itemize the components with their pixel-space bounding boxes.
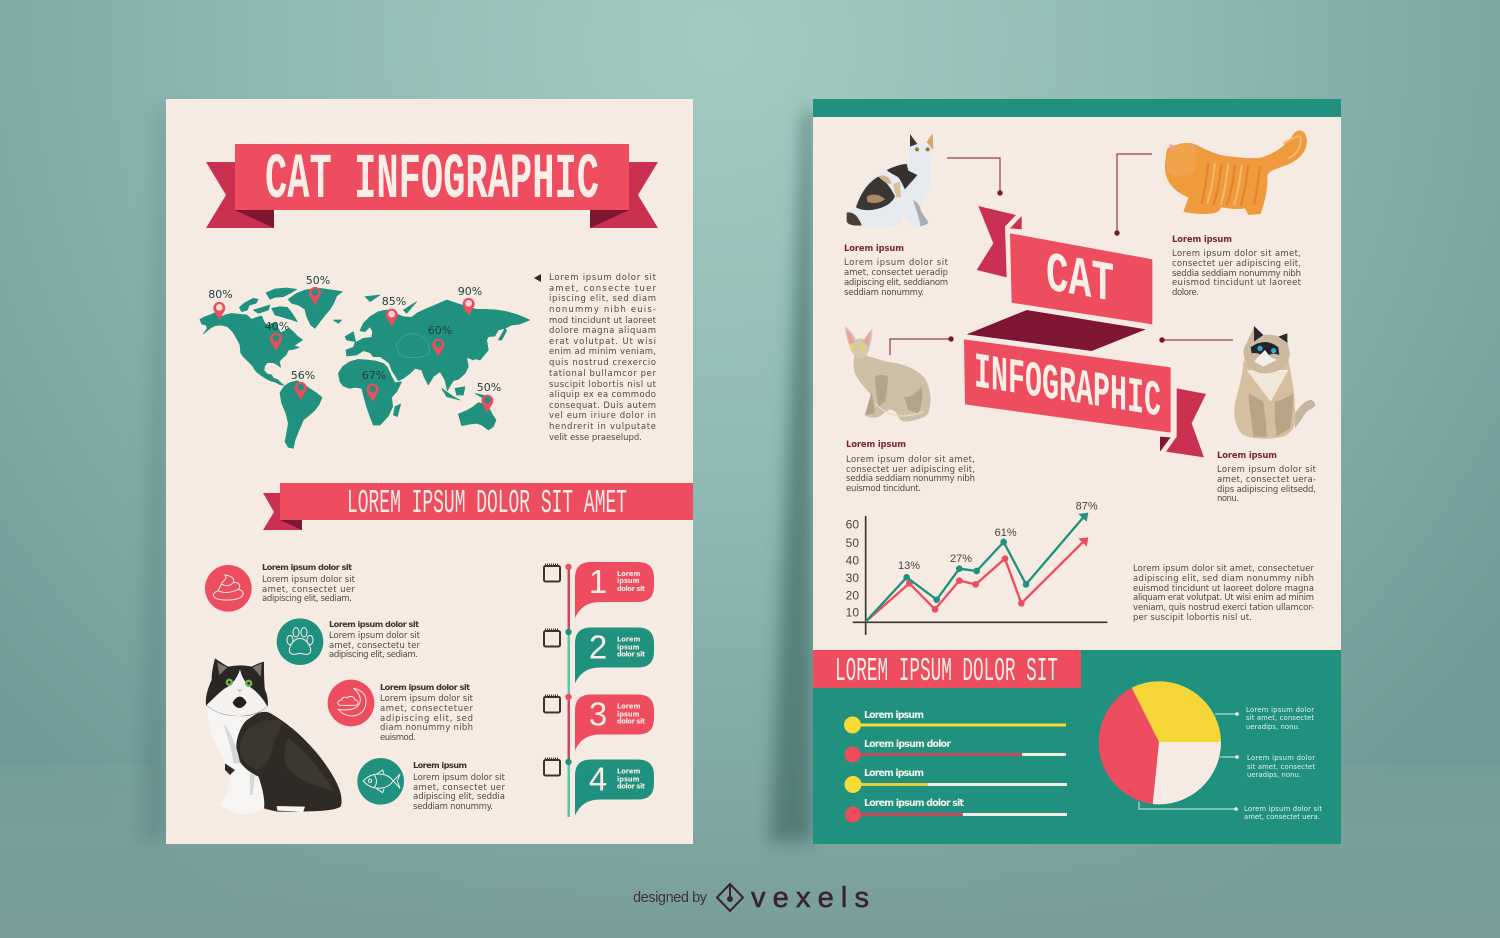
- section ribbon: [263, 483, 693, 530]
- green series: [866, 513, 1088, 622]
- text: item 3: euismod.: [380, 733, 416, 743]
- progress bars: [844, 710, 1067, 822]
- bubble 2: [575, 628, 654, 684]
- text: item 2: amet, consectetu ter: [329, 641, 420, 651]
- map paragraph: nonummy nibh euis-: [549, 305, 656, 315]
- text: item 1: Lorem ipsum dolor sit: [262, 562, 352, 572]
- pie legend: ueradips, nonu.: [1247, 771, 1301, 779]
- map paragraph: aliquip ex ea commodo: [549, 390, 656, 400]
- map paragraph: vel eum iriure dolor in: [549, 411, 656, 421]
- bubble 1: dolor sit: [617, 585, 645, 593]
- bar 3: Lorem ipsum: [864, 768, 924, 779]
- section ribbon: LOREM IPSUM DOLOR SIT AMET: [347, 485, 627, 522]
- chart paragraph: per suscipit lobortis nisl ut.: [1133, 613, 1252, 623]
- pie legend: Lorem ipsum dolor: [1247, 754, 1315, 762]
- axis labels: 60: [846, 518, 859, 532]
- map paragraph: hendrerit in vulputate: [549, 422, 656, 432]
- map paragraph: suscipit lobortis nisl ut: [549, 380, 657, 390]
- caption: calico cat: adipiscing elit, seddianom: [844, 278, 948, 288]
- chart value labels: [898, 501, 1098, 572]
- caption: ragdoll cat: Lorem ipsum: [1217, 450, 1277, 460]
- caption: sphynx cat: Lorem ipsum dolor sit amet,: [846, 455, 975, 465]
- axis labels: [846, 518, 859, 620]
- axis labels: 40: [846, 553, 859, 567]
- timeline: [544, 562, 654, 817]
- map paragraph: erat volutpat. Ut wisi: [549, 337, 656, 347]
- chart value labels: 27%: [950, 553, 972, 565]
- section heading band: [813, 650, 1081, 690]
- icon: calico cat: [846, 133, 934, 228]
- map percent labels: 40%: [265, 320, 289, 333]
- caption: calico cat: Lorem ipsum: [844, 243, 904, 253]
- chart value labels: 87%: [1076, 501, 1098, 513]
- title ribbon: [206, 144, 658, 228]
- icon: ragdoll cat: [1234, 326, 1315, 439]
- caption: sphynx cat: consectet uer adipiscing elit,: [846, 465, 975, 475]
- caption: calico cat: [844, 243, 949, 298]
- bar 2: Lorem ipsum dolor: [864, 739, 951, 750]
- bubble 2: dolor sit: [617, 650, 645, 658]
- text: item 2: [329, 619, 421, 660]
- caption: orange cat: seddia seddiam nonummy nibh: [1172, 269, 1301, 279]
- axis labels: 20: [846, 588, 859, 602]
- map paragraph: velit esse praeselupd.: [549, 433, 642, 443]
- text: item 1: amet, consectet uer: [262, 585, 356, 595]
- map percent labels: 56%: [291, 369, 315, 382]
- map paragraph: quis nostrud crexercio: [549, 358, 656, 368]
- angled title: INFOGRAPHIC: INFOGRAPHIC: [974, 345, 1161, 432]
- bar 1: [844, 710, 1066, 734]
- credit: designed by vexels: vexels: [751, 882, 869, 914]
- section heading band: LOREM IPSUM DOLOR SIT: [835, 653, 1058, 690]
- caption: calico cat: seddiam nonummy.: [844, 288, 924, 298]
- pie chart: [1099, 681, 1221, 804]
- icon: paw: [277, 618, 323, 665]
- bubble 4: [575, 760, 654, 816]
- bubble 3: 3: [589, 696, 607, 732]
- map percent labels: 85%: [382, 295, 406, 308]
- pie legend: sit amet, consectet: [1246, 714, 1314, 722]
- chart paragraph: Lorem ipsum dolor sit amet, consectetuer: [1133, 564, 1314, 574]
- map percent labels: [208, 274, 501, 394]
- caption: ragdoll cat: nonu.: [1217, 494, 1239, 504]
- caption: orange cat: dolore.: [1172, 288, 1199, 298]
- chart value labels: 13%: [898, 560, 920, 572]
- pins: [213, 287, 493, 413]
- pie legend: amet, consectet uera.: [1244, 813, 1320, 821]
- caption: sphynx cat: euismod tincidunt.: [846, 484, 921, 494]
- text: item 4: [413, 760, 506, 812]
- panel: right poster: [813, 99, 1341, 844]
- text: item 3: diam nonummy nibh: [380, 723, 473, 733]
- upper ribbon: [977, 206, 1152, 324]
- bar 3: [844, 768, 1067, 793]
- map paragraph: consequat. Duis autem: [549, 401, 656, 411]
- text: item 4: seddiam nonummy.: [413, 802, 493, 812]
- text: item 2: Lorem ipsum dolor sit: [329, 631, 421, 641]
- chart value labels: 61%: [995, 527, 1017, 539]
- text: item 4: Lorem ipsum: [413, 760, 467, 770]
- text: item 4: amet, consectet uer: [413, 783, 506, 793]
- text: item 3: amet, consectetuer: [380, 704, 474, 714]
- icon: sphynx cat: [845, 327, 931, 422]
- caption: ragdoll cat: amet, consectet uera-: [1217, 475, 1316, 485]
- axis labels: 50: [846, 536, 859, 550]
- world map with pins: [200, 287, 530, 448]
- text: item 3: adipiscing elit, sed: [380, 714, 473, 724]
- text: item 4: adipiscing elit, seddia: [413, 792, 505, 802]
- lower ribbon: [964, 339, 1206, 457]
- map percent labels: 80%: [208, 288, 233, 301]
- caption: orange cat: [1172, 234, 1302, 298]
- caption: sphynx cat: Lorem ipsum: [846, 439, 906, 449]
- bubble 4: ipsum: [617, 776, 640, 784]
- chart paragraph: adipiscing elit, sed diam nonummy nibh: [1133, 574, 1314, 584]
- bubble 3: Lorem: [617, 702, 640, 710]
- text: item 2: adipiscing elit, sediam.: [329, 650, 418, 660]
- caption: orange cat: Lorem ipsum: [1172, 234, 1232, 244]
- cats and angled title: [845, 130, 1315, 457]
- chart paragraph: euismod tincidunt ut laoreet dolore magna: [1133, 584, 1314, 594]
- caption: sphynx cat: seddia seddiam nonummy nibh: [846, 474, 975, 484]
- centre fold: [967, 310, 1146, 351]
- caption: orange cat: consectet uer adipiscing elit,: [1172, 259, 1301, 269]
- map paragraph: enim ad minim veniam,: [549, 347, 656, 357]
- vertical timeline: [565, 564, 572, 817]
- map paragraph: ipiscing elit, sed diam: [549, 294, 656, 304]
- pie legend: Lorem ipsum dolor sit: [1244, 805, 1322, 813]
- panel: left poster: [166, 99, 693, 844]
- bubble 3: ipsum: [617, 710, 640, 718]
- bubble 3: [575, 694, 654, 750]
- continents: [200, 288, 530, 448]
- credit: designed by vexels: [633, 882, 869, 914]
- caption: ragdoll cat: dips adipiscing elitsedd,: [1217, 485, 1316, 495]
- icon: orange cat: [1165, 130, 1307, 215]
- pie legend: [1139, 706, 1322, 821]
- map paragraph: mod tincidunt ut laoreet: [549, 316, 657, 326]
- map paragraph: Lorem ipsum dolor sit: [549, 273, 657, 283]
- map paragraph: tational bullamcor per: [549, 369, 656, 379]
- bubble 2: ipsum: [617, 644, 640, 652]
- map percent labels: 67%: [362, 369, 386, 382]
- calendar icons: [544, 564, 560, 776]
- map percent labels: 90%: [458, 285, 482, 298]
- chart paragraph: [1133, 564, 1314, 623]
- angled title: CAT: CAT: [1046, 242, 1114, 318]
- caption: calico cat: amet, consectet ueradip: [844, 268, 948, 278]
- text: item 2: Lorem ipsum dolor sit: [329, 619, 419, 629]
- caption: ragdoll cat: [1217, 450, 1317, 504]
- caption: orange cat: euismod tincidunt ut laoreet: [1172, 278, 1302, 288]
- bar 2: [844, 739, 1066, 762]
- map paragraph: [534, 273, 657, 443]
- map paragraph: dolore magna aliquam: [549, 326, 656, 336]
- bubble 4: dolor sit: [617, 782, 645, 790]
- line chart: [846, 501, 1107, 635]
- chart paragraph: aliquam erat volutpat. Ut wisi enim ad minim: [1133, 593, 1314, 603]
- icon: vexels diamond: [717, 884, 743, 911]
- axis labels: 30: [846, 571, 859, 585]
- bubble 3: dolor sit: [617, 718, 645, 726]
- bar 1: Lorem ipsum: [864, 710, 924, 721]
- text: item 1: Lorem ipsum dolor sit: [262, 575, 356, 585]
- map percent labels: 60%: [428, 324, 452, 337]
- map percent labels: 50%: [477, 381, 501, 394]
- pie legend: ueradips, nonu.: [1246, 723, 1300, 731]
- text: item 3: [380, 682, 474, 743]
- black and white cat: [206, 658, 342, 814]
- bar 4: [845, 798, 1067, 822]
- caption: sphynx cat: [846, 439, 975, 494]
- bubble 2: Lorem: [617, 636, 640, 644]
- icon: fish: [357, 758, 404, 805]
- connector lines: [890, 154, 1233, 355]
- bubble 1: Lorem: [617, 570, 640, 578]
- bubble 4: Lorem: [617, 768, 640, 776]
- pie legend: Lorem ipsum dolor: [1246, 706, 1314, 714]
- circle icons: [205, 565, 404, 805]
- text: item 4: Lorem ipsum dolor sit: [413, 773, 506, 783]
- bubble 1: ipsum: [617, 577, 640, 585]
- icon: litter: [205, 565, 252, 612]
- credit: designed by vexels: designed by: [633, 890, 708, 906]
- title ribbon: CAT INFOGRAPHIC: [265, 145, 599, 217]
- text: item 3: Lorem ipsum dolor sit: [380, 682, 470, 692]
- map percent labels: 50%: [306, 274, 330, 287]
- caption: orange cat: Lorem ipsum dolor sit amet,: [1172, 249, 1301, 259]
- icon: moon and cloud: [328, 680, 374, 726]
- caption: calico cat: Lorem ipsum dolor sit: [844, 258, 949, 268]
- axis labels: 10: [846, 606, 859, 620]
- map paragraph: amet, consecte tuer: [549, 284, 656, 294]
- text: item 1: adipiscing elit, sediam.: [262, 594, 352, 604]
- chart paragraph: veniam, quis nostrud exerci tation ullamcor-: [1133, 603, 1314, 613]
- text: item 1: [262, 562, 356, 604]
- caption: ragdoll cat: Lorem ipsum dolor sit: [1217, 465, 1317, 475]
- bubble 2: 2: [589, 628, 607, 666]
- bubble 1: 1: [589, 563, 607, 600]
- bubble 1: [575, 562, 654, 618]
- red series: [866, 537, 1088, 622]
- pie legend: sit amet, consectet: [1247, 763, 1315, 771]
- text: item 3: Lorem ipsum dolor sit: [380, 694, 474, 704]
- bar 4: Lorem ipsum dolor sit: [864, 798, 965, 809]
- bubble 4: 4: [589, 760, 607, 798]
